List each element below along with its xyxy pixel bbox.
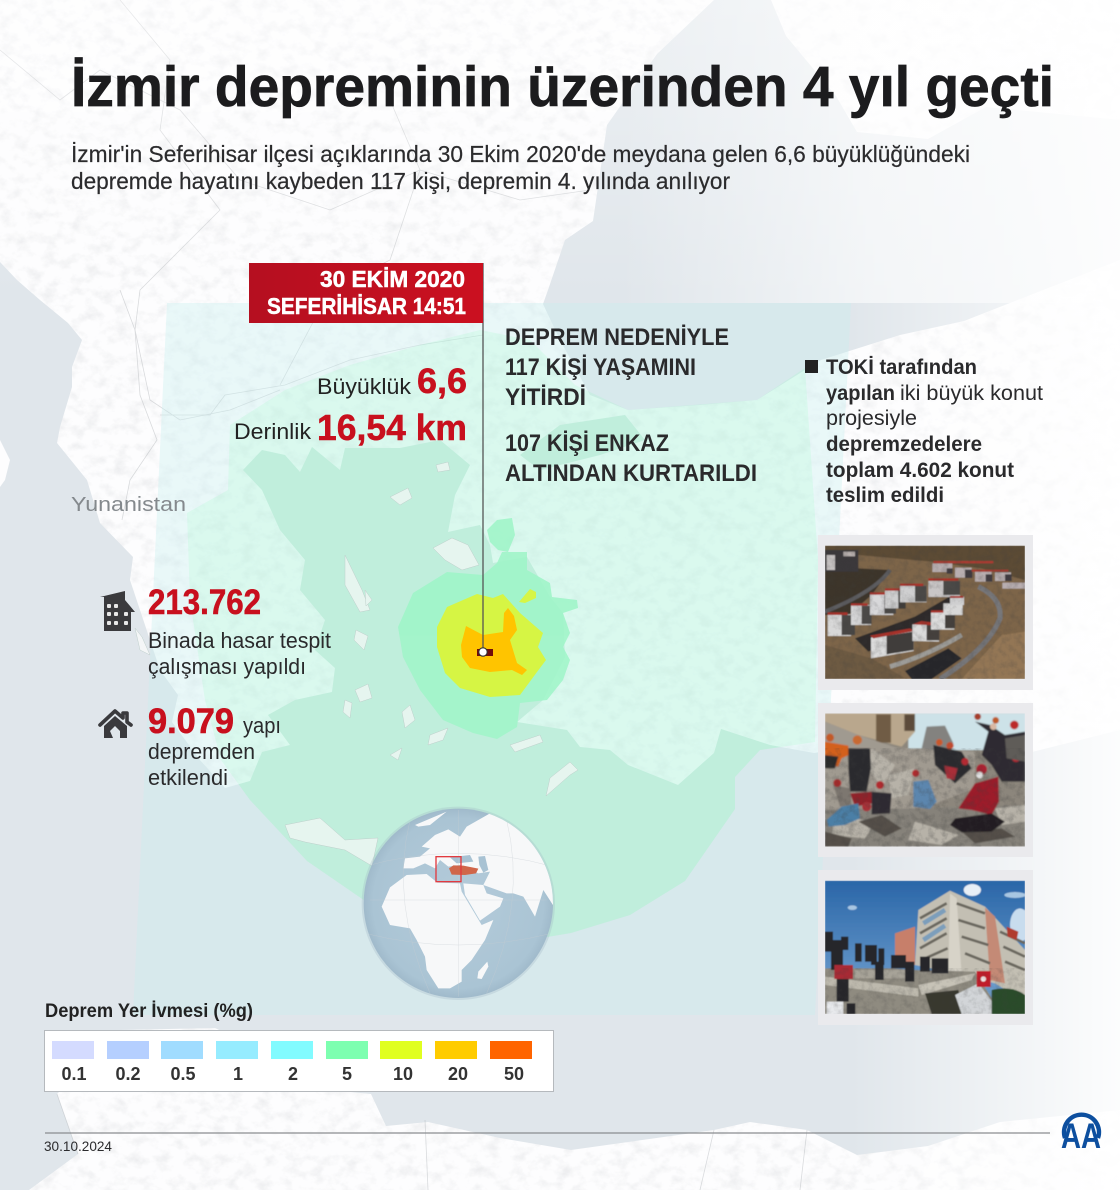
legend: 50	[504, 1064, 524, 1084]
legend: 1	[233, 1064, 243, 1084]
stat: affected structures: depremden	[148, 739, 255, 764]
stat: affected structures: 9.079	[148, 702, 234, 741]
icon: building	[100, 591, 135, 631]
locator globe	[362, 807, 555, 1000]
depth	[234, 407, 467, 448]
legend: 0.2	[115, 1064, 141, 1084]
housing text: projesiyle	[826, 406, 917, 430]
leader line	[482, 263, 484, 650]
depth: Derinlik	[234, 419, 312, 444]
magnitude: 6,6	[417, 362, 467, 401]
housing text: TOKİ tarafından	[826, 355, 977, 379]
housing text: iki büyük konut	[900, 381, 1043, 405]
footer rule	[45, 1132, 1050, 1134]
housing text: yapılan	[826, 381, 895, 405]
date and place banner: SEFERİHİSAR 14:51	[267, 293, 466, 319]
right fade	[850, 303, 1120, 1190]
date: 30.10.2024	[44, 1138, 112, 1154]
AA logo: AA	[1061, 1117, 1101, 1156]
casualties text: ALTINDAN KURTARILDI	[505, 460, 757, 487]
subtitle: depremde hayatını kaybeden 117 kişi, depremin 4. yılında anılıyor	[71, 168, 730, 194]
stat: damage assessment: çalışması yapıldı	[148, 654, 306, 679]
casualties text	[505, 324, 757, 487]
shake zone: 20 %g	[461, 608, 527, 675]
date and place banner: 30 EKİM 2020	[320, 266, 465, 292]
casualties text: YİTİRDİ	[505, 384, 586, 411]
housing text: depremzedelere	[826, 432, 982, 456]
islands	[135, 462, 578, 866]
photo frame 1: housing	[818, 535, 1033, 690]
legend title: Deprem Yer İvmesi (%g)	[45, 999, 253, 1022]
epicentre marker	[477, 648, 493, 656]
rescuers	[825, 742, 849, 767]
magnitude	[317, 362, 467, 401]
shake zone: 10 %g	[437, 589, 546, 697]
casualties text: 117 KİŞİ YAŞAMINI	[505, 354, 696, 381]
subtitle	[71, 141, 970, 194]
photo frame 3: collapsed building	[818, 870, 1033, 1025]
depth: 16,54 km	[317, 407, 467, 448]
icon: house	[100, 711, 131, 738]
stat: affected structures	[148, 702, 281, 790]
subtitle: İzmir'in Seferihisar ilçesi açıklarında 30 Ekim 2020'de meydana gelen 6,6 büyüklüğündeki	[71, 141, 970, 167]
casualties text: DEPREM NEDENİYLE	[505, 324, 729, 351]
legend: 5	[342, 1064, 352, 1084]
map overlay: ground motion area	[133, 303, 851, 1015]
stat: damage assessment: 213.762	[148, 583, 261, 622]
shake zone: 2 %g	[187, 330, 818, 945]
stat: damage assessment	[148, 583, 332, 679]
legend: 0.5	[170, 1064, 196, 1084]
housing text	[805, 355, 1043, 507]
stat: affected structures: etkilendi	[148, 765, 228, 790]
sicily edge	[0, 440, 10, 487]
magnitude: Büyüklük	[317, 374, 412, 399]
legend	[44, 1030, 554, 1092]
housing text: toplam 4.602 konut	[826, 458, 1014, 482]
shake zone: 5 %g	[398, 518, 578, 739]
buildings	[828, 578, 964, 658]
map label: Greece: Yunanistan	[71, 494, 186, 516]
stat: affected structures: yapı	[243, 713, 281, 738]
legend: 10	[393, 1064, 413, 1084]
photo frame 2: rescue	[818, 703, 1033, 857]
title: İzmir depreminin üzerinden 4 yıl geçti	[71, 55, 1054, 119]
stat: damage assessment: Binada hasar tespit	[148, 628, 332, 653]
legend: 2	[288, 1064, 298, 1084]
housing text: teslim edildi	[826, 483, 944, 507]
date and place banner	[249, 263, 483, 323]
legend: 0.1	[61, 1064, 87, 1084]
legend: 20	[448, 1064, 468, 1084]
casualties text: 107 KİŞİ ENKAZ	[505, 430, 669, 457]
